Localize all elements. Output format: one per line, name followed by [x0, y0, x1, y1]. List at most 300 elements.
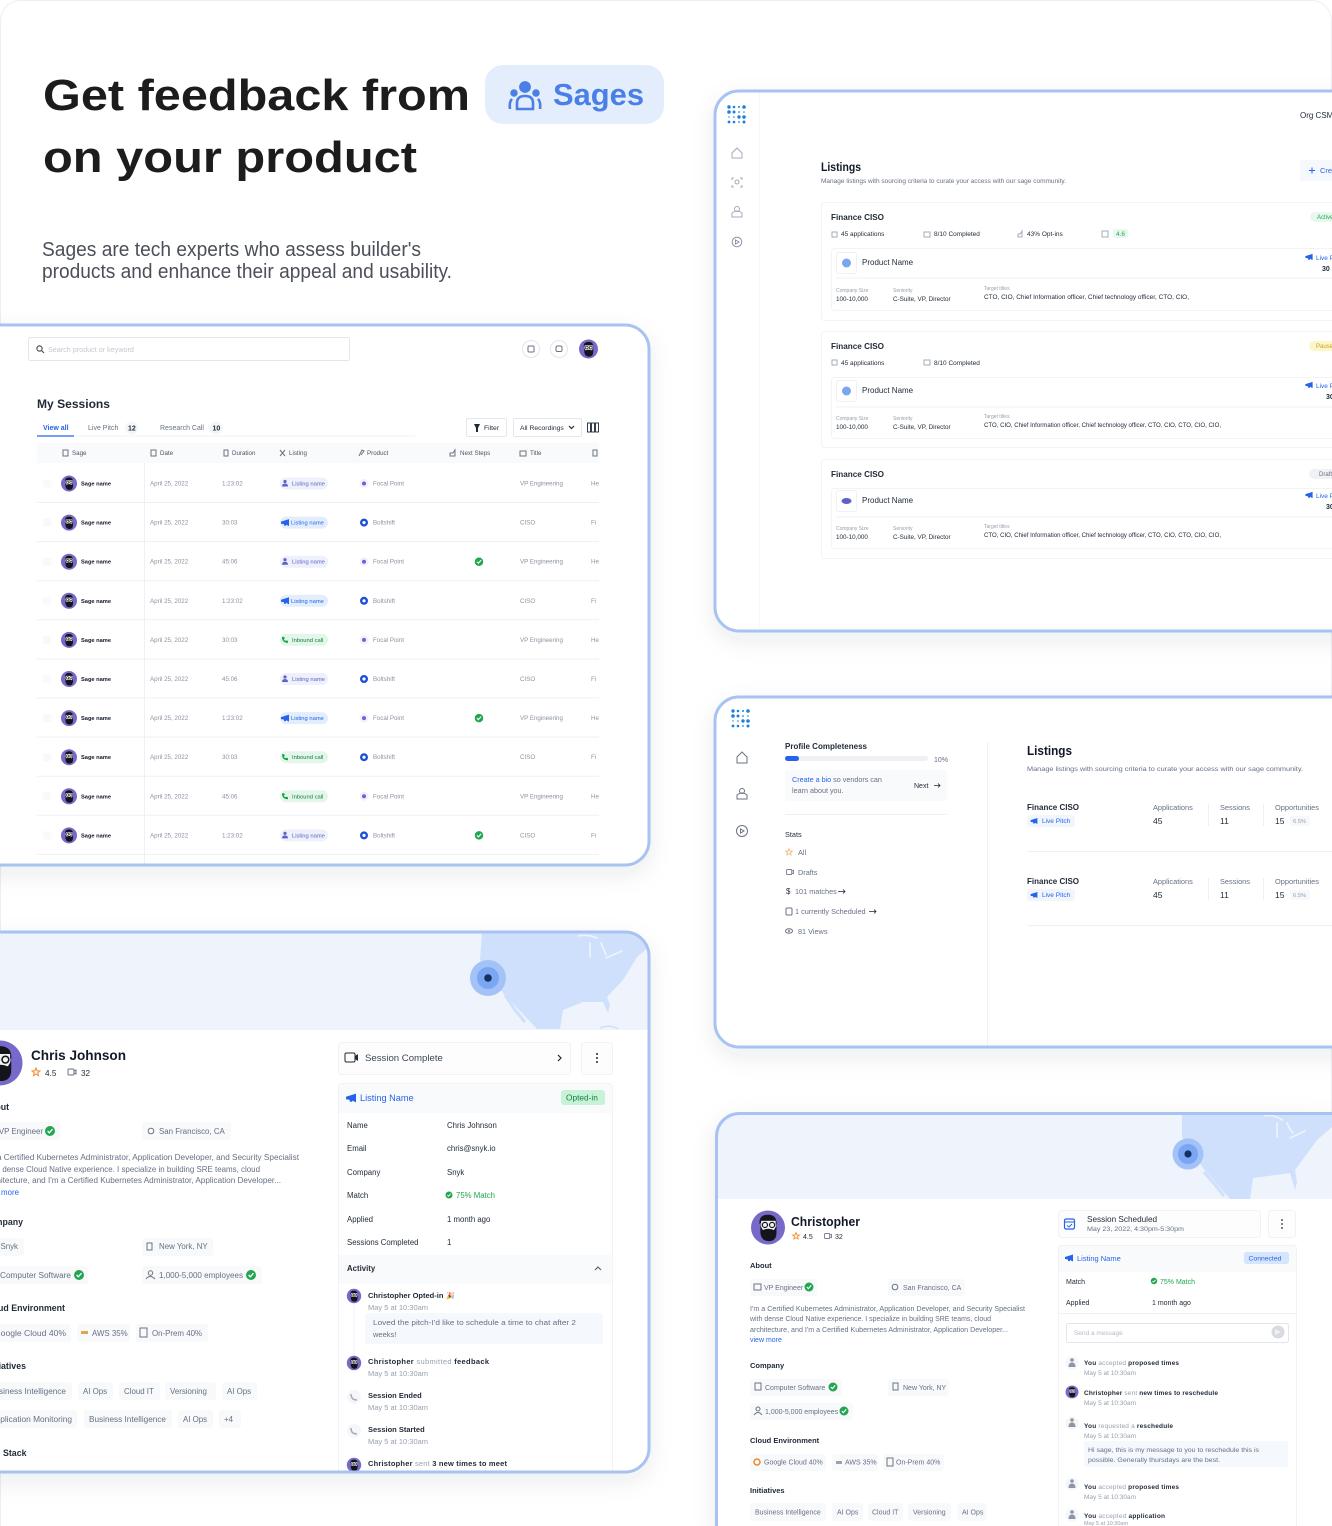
- listing header: Connected: [1248, 1256, 1282, 1262]
- section: about: view more: [750, 1337, 782, 1344]
- product block: CTO, CIO, Chief Information officer, Chief technology officer, CTO, CIO, CTO, CIO, CIO,: [984, 422, 1221, 429]
- listing header: Opted-in: [566, 1092, 598, 1102]
- avatar and name: 32: [835, 1234, 843, 1241]
- heading: [821, 162, 1066, 185]
- table header: [62, 448, 598, 456]
- product block: 100-10,000: [836, 534, 868, 541]
- table row 10: [37, 827, 599, 854]
- table row 10: Boltshift: [373, 832, 395, 839]
- listing details: Applied: [347, 1215, 373, 1224]
- listing card 1: 4.6: [1116, 231, 1125, 238]
- table row 9: He: [591, 793, 599, 800]
- section: cloud environment: AWS 35%: [92, 1329, 128, 1338]
- listing row 2: Opportunities: [1275, 877, 1319, 886]
- section: about: I'm a Certified Kubernetes Administrator, Application Developer, and Security Specialist: [750, 1306, 1025, 1313]
- section: initiatives: Cloud IT: [124, 1387, 154, 1396]
- table row 4: [37, 593, 599, 620]
- stats list: Stats: [785, 830, 802, 839]
- table row 3: [37, 554, 599, 581]
- panel: Christopher profile: [715, 1112, 1332, 1526]
- section: initiatives: AI Ops: [837, 1510, 859, 1516]
- product block: CTO, CIO, Chief Information officer, Chief technology officer, CTO, CIO, CTO, CIO, CIO,: [984, 532, 1221, 539]
- listing row 2: Live Pitch: [1042, 892, 1071, 899]
- table row 5: He: [591, 637, 599, 644]
- heading: Manage listings with sourcing criteria to curate your access with our sage community.: [1027, 766, 1303, 773]
- column divider: [144, 463, 145, 864]
- section: initiatives: AI Ops: [83, 1387, 107, 1396]
- filter controls: [466, 418, 598, 436]
- table row 2: Fi: [591, 520, 596, 527]
- table row 4: Sage name: [81, 599, 111, 605]
- section: company: New York, NY: [159, 1242, 208, 1251]
- table row 4: Fi: [591, 598, 596, 605]
- listing details: Sessions Completed: [347, 1238, 419, 1247]
- session scheduled card: May 23, 2022, 4:30pm-5:30pm: [1087, 1226, 1184, 1233]
- section: about: with dense Cloud Native experience. I specialize in building SRE teams, cloud: [749, 1316, 991, 1323]
- map header: [715, 1112, 1332, 1199]
- tabs: [37, 422, 415, 436]
- search bar: [28, 338, 350, 360]
- listing row 1: [1027, 802, 1332, 852]
- activity timeline: May 5 at 10:30am: [1084, 1494, 1136, 1501]
- table row 5: 30:03: [222, 637, 238, 644]
- listing card 1: 8/10 Completed: [934, 231, 980, 238]
- product block: C-Suite, VP, Director: [893, 424, 951, 431]
- session complete card: [338, 1042, 612, 1074]
- table row 6: Sage name: [81, 677, 111, 683]
- listing details: chris@snyk.io: [447, 1144, 496, 1153]
- product block: Company Size: [836, 288, 869, 294]
- listing details: Name: [347, 1121, 368, 1130]
- stats list: 101 matches: [795, 887, 837, 896]
- table row 6: [37, 671, 599, 698]
- column divider: [986, 742, 988, 1047]
- listing details: [347, 1121, 497, 1247]
- table row 8: Boltshift: [373, 754, 395, 761]
- listing details: Match: [1066, 1279, 1085, 1286]
- activity timeline: You accepted application: [1084, 1513, 1165, 1520]
- table header: Date: [160, 450, 174, 457]
- product block: Target titles: [984, 286, 1010, 292]
- listing row 2: Applications: [1153, 877, 1193, 886]
- table header: Listing: [289, 450, 307, 457]
- listing row 1: 11: [1220, 816, 1229, 826]
- listing card 1: [822, 202, 1332, 320]
- table row 8: CISO: [520, 754, 535, 761]
- table row 3: Sage name: [81, 560, 111, 566]
- section: company: New York, NY: [903, 1385, 947, 1392]
- section: initiatives: Business Intelligence: [89, 1415, 167, 1424]
- avatar and name: 4.5: [45, 1069, 57, 1078]
- activity timeline: May 5 at 10:30am: [368, 1369, 428, 1378]
- product block: Company Size: [836, 416, 869, 422]
- listing header: [1059, 1246, 1296, 1272]
- panel: Chris Johnson profile: [0, 932, 650, 1484]
- table row 1: VP Engineering: [520, 480, 563, 488]
- product block: [832, 488, 1332, 548]
- section: initiatives: [750, 1486, 987, 1521]
- listing row 2: Finance CISO: [1027, 876, 1079, 886]
- listing details: 75% Match: [456, 1191, 495, 1200]
- title: Get feedback from: [43, 71, 470, 120]
- filter controls: Filter: [484, 425, 500, 432]
- profile completeness: Create a bio so vendors can: [792, 775, 882, 784]
- activity timeline: Session Ended: [368, 1391, 422, 1400]
- activity timeline: May 5 at 10:30am: [1084, 1400, 1136, 1407]
- table row 7: Focal Point: [373, 715, 404, 722]
- heading: my sessions: My Sessions: [37, 397, 110, 411]
- table row 8: Sage name: [81, 755, 111, 761]
- avatar and name: Christopher: [791, 1215, 860, 1229]
- table row 1: Sage name: [81, 482, 111, 488]
- table row 1: April 25, 2022: [150, 480, 189, 488]
- sidebar icons: [731, 709, 750, 836]
- table row 7: 1:23:02: [222, 715, 243, 722]
- listing row 1: 6.5%: [1293, 819, 1306, 825]
- table header: Duration: [232, 450, 256, 457]
- profile completeness: Next: [914, 783, 928, 790]
- table row 5: [37, 632, 599, 659]
- section: cloud environment: Google Cloud 40%: [764, 1460, 823, 1466]
- listing details: 1 month ago: [1152, 1300, 1191, 1307]
- section: about: [749, 1261, 1025, 1344]
- stats list: 1 currently Scheduled: [795, 907, 866, 916]
- listing row 1: Finance CISO: [1027, 802, 1079, 812]
- activity header: Activity: [347, 1264, 376, 1273]
- stats list: Drafts: [798, 868, 818, 877]
- activity timeline: Session Started: [368, 1425, 425, 1434]
- avatar and name: 32: [81, 1069, 91, 1078]
- table row 2: Boltshift: [373, 520, 395, 527]
- listing details: Chris Johnson: [447, 1121, 497, 1130]
- table row 1: He: [591, 480, 599, 488]
- activity timeline: Christopher sent new times to reschedule: [1084, 1390, 1218, 1397]
- table row 8: Inbound call: [292, 755, 323, 761]
- product block: Product Name: [862, 258, 914, 267]
- table row 3: He: [591, 559, 599, 566]
- table row 1: Focal Point: [373, 480, 404, 488]
- section: company: [0, 1220, 256, 1280]
- table row 2: CISO: [520, 520, 535, 527]
- table row 9: 45:06: [222, 793, 238, 800]
- listing details: [1059, 1278, 1296, 1314]
- table row 9: VP Engineering: [520, 793, 563, 800]
- listing row 1: 15: [1275, 816, 1285, 826]
- activity timeline: 🎉: [446, 1291, 455, 1300]
- badge: Sages: [485, 65, 664, 124]
- activity timeline: You requested a reschedule: [1084, 1423, 1173, 1430]
- table row 1: 1:23:02: [222, 480, 243, 488]
- section: initiatives: AI Ops: [183, 1415, 207, 1424]
- table row 6: CISO: [520, 676, 535, 683]
- table row 10: Fi: [591, 832, 596, 839]
- profile completeness: 10%: [934, 757, 948, 764]
- listing details: Applied: [1066, 1300, 1089, 1307]
- badge: Sages: Sages: [553, 77, 644, 112]
- product block: [832, 248, 1332, 310]
- activity timeline: Christopher submitted feedback: [368, 1357, 490, 1366]
- listing details: 75% Match: [1160, 1279, 1195, 1286]
- heading: [1027, 743, 1303, 773]
- table row 7: April 25, 2022: [150, 715, 189, 722]
- table row 3: Focal Point: [373, 559, 404, 566]
- avatar and name: [751, 1210, 860, 1244]
- profile completeness: Profile Completeness: [785, 742, 868, 751]
- listing card: [1058, 1246, 1296, 1526]
- listing row 2: 15: [1275, 890, 1285, 900]
- table row 2: Sage name: [81, 521, 111, 527]
- search bar: Search product or keyword: [48, 345, 134, 354]
- icon: people group: [510, 82, 540, 109]
- table row 6: Boltshift: [373, 676, 395, 683]
- message input: Send a message: [1074, 1330, 1123, 1337]
- table row 8: Fi: [591, 754, 596, 761]
- section: cloud environment: On-Prem 40%: [152, 1329, 202, 1338]
- listing row 1: Applications: [1153, 803, 1193, 812]
- activity timeline: May 5 at 10:30am: [368, 1403, 428, 1412]
- section: company: 1,000-5,000 employees: [159, 1271, 243, 1280]
- section: initiatives: Stack: [3, 1448, 27, 1458]
- listing details: Email: [347, 1144, 367, 1153]
- tabs: View all: [43, 425, 69, 432]
- session scheduled card: Session Scheduled: [1087, 1215, 1158, 1224]
- listing row 2: 45: [1153, 890, 1163, 900]
- table row 9: April 25, 2022: [150, 793, 189, 800]
- activity timeline: Christopher sent 3 new times to meet: [368, 1459, 508, 1468]
- listing row 2: Sessions: [1220, 877, 1250, 886]
- stats list: [785, 830, 876, 936]
- table row 1: [37, 476, 599, 502]
- table row 2: April 25, 2022: [150, 520, 189, 527]
- listing card 1: Finance CISO: [831, 212, 884, 222]
- tabs: Live Pitch: [88, 425, 118, 432]
- stats list: 81 Views: [798, 927, 828, 936]
- activity timeline: [347, 1289, 603, 1472]
- listing card: [338, 1084, 612, 1484]
- table row 4: CISO: [520, 598, 535, 605]
- session complete card: Session Complete: [365, 1053, 443, 1064]
- listing card 2: 45 applications: [841, 360, 885, 367]
- table row 6: Listing name: [292, 677, 325, 683]
- listing header: [339, 1084, 612, 1105]
- section: cloud environment: AWS 35%: [845, 1460, 877, 1466]
- table header: Sage: [72, 450, 87, 457]
- product block: 30: [1322, 266, 1330, 273]
- table row 7: VP Engineering: [520, 715, 563, 722]
- sidebar: [727, 91, 760, 631]
- product block: Target titles: [984, 414, 1010, 420]
- product block: 100-10,000: [836, 424, 868, 431]
- table row 2: 30:03: [222, 520, 238, 527]
- product block: C-Suite, VP, Director: [893, 296, 951, 303]
- activity timeline: May 5 at 10:30am: [368, 1303, 428, 1312]
- listing row 2: 11: [1220, 890, 1229, 900]
- section: initiatives: AI Ops: [227, 1387, 251, 1396]
- section: company: Company: [750, 1361, 785, 1370]
- section: initiatives: AI Ops: [962, 1510, 984, 1516]
- table header: Title: [530, 450, 542, 457]
- section: about: VP Engineer: [764, 1285, 804, 1292]
- table row 10: CISO: [520, 832, 535, 839]
- activity timeline: [1066, 1356, 1288, 1526]
- product block: Product Name: [862, 386, 914, 395]
- activity timeline: May 5 at 10:30am: [1084, 1370, 1136, 1377]
- table row 9: Sage name: [81, 794, 111, 800]
- listing details: 1: [447, 1238, 451, 1247]
- section: initiatives: [0, 1361, 257, 1458]
- table row 4: 1:23:02: [222, 598, 243, 605]
- activity timeline: May 5 at 10:30am: [368, 1437, 428, 1446]
- table row 10: Sage name: [81, 833, 111, 839]
- product block: Company Size: [836, 526, 869, 532]
- activity timeline: possible. Generally thursdays are the best.: [1088, 1457, 1220, 1464]
- table row 7: Sage name: [81, 716, 111, 722]
- heading: Listings: [1027, 743, 1072, 758]
- table row 9: Focal Point: [373, 793, 404, 800]
- table row 7: He: [591, 715, 599, 722]
- section: about: VP Engineer: [0, 1127, 43, 1136]
- table row 8: [37, 749, 599, 776]
- create button: [1300, 160, 1332, 181]
- listing row 1: Opportunities: [1275, 803, 1319, 812]
- table row 5: Inbound call: [292, 638, 323, 644]
- product block: Seniority: [893, 416, 913, 422]
- section: initiatives: Versioning: [913, 1510, 946, 1516]
- table row 6: April 25, 2022: [150, 676, 189, 683]
- session scheduled card: [1058, 1210, 1296, 1238]
- profile completeness: [785, 742, 948, 814]
- table header: Product: [367, 450, 389, 457]
- heading: Listings: [821, 162, 861, 174]
- table row 2: [37, 515, 599, 542]
- header icons and avatar: [522, 340, 598, 358]
- table row 4: April 25, 2022: [150, 598, 189, 605]
- table row 4: Boltshift: [373, 598, 395, 605]
- avatar and name: Chris Johnson: [31, 1048, 126, 1063]
- table row 1: Listing name: [292, 482, 325, 488]
- panel: listings with cards: [715, 91, 1332, 631]
- message input: [1066, 1324, 1288, 1342]
- table row 5: VP Engineering: [520, 637, 563, 644]
- section: initiatives: Versioning: [170, 1387, 207, 1396]
- listing row 1: Sessions: [1220, 803, 1250, 812]
- stats list: All: [798, 848, 806, 857]
- product block: C-Suite, VP, Director: [893, 534, 951, 541]
- listing card 2: Finance CISO: [831, 341, 884, 351]
- product block: CTO, CIO, Chief Information officer, Chief technology officer, CTO, CIO,: [984, 294, 1189, 301]
- section: cloud environment: Cloud Environment: [750, 1436, 820, 1445]
- listing header: Listing Name: [360, 1093, 414, 1103]
- title: [43, 71, 470, 182]
- listing details: Company: [347, 1168, 380, 1177]
- section: cloud environment: On-Prem 40%: [896, 1460, 940, 1466]
- activity timeline: Christopher Opted-in: [368, 1291, 444, 1300]
- table row 9: [37, 788, 599, 815]
- table row 8: April 25, 2022: [150, 754, 189, 761]
- table row 9: Inbound call: [292, 794, 323, 800]
- profile completeness: learn about you.: [792, 786, 844, 795]
- activity timeline: You accepted proposed times: [1084, 1360, 1179, 1367]
- tabs: Research Call: [160, 425, 204, 432]
- listing card 2: 8/10 Completed: [934, 360, 980, 367]
- activity header: [347, 1265, 602, 1272]
- listing details: 1 month ago: [447, 1215, 491, 1224]
- table row 5: Sage name: [81, 638, 111, 644]
- section: initiatives: +4: [224, 1415, 234, 1424]
- listing header: Listing Name: [1077, 1254, 1121, 1263]
- section: company: Computer Software: [0, 1271, 72, 1280]
- section: initiatives: Business Intelligence: [755, 1510, 821, 1516]
- avatar and name: 4.5: [803, 1234, 813, 1241]
- avatar and name: [0, 1040, 126, 1086]
- activity timeline: weeks!: [372, 1330, 396, 1339]
- product block: Seniority: [893, 288, 913, 294]
- section: about: About: [750, 1261, 772, 1270]
- product block: Target titles: [984, 524, 1010, 530]
- listing card 1: 43% Opt-ins: [1027, 231, 1064, 238]
- listing card 3: Draft: [1319, 472, 1332, 478]
- stats list: $: [786, 887, 791, 896]
- table row 3: VP Engineering: [520, 559, 563, 566]
- table row 6: Fi: [591, 676, 596, 683]
- table row 3: Listing name: [292, 560, 325, 566]
- section: about: San Francisco, CA: [903, 1285, 962, 1292]
- section: about: architecture, and I'm a Certified Kubernetes Administrator, Application Developer...: [750, 1327, 1008, 1334]
- section: about: San Francisco, CA: [159, 1127, 226, 1136]
- table header: Next Steps: [460, 450, 490, 457]
- section: company: Snyk: [0, 1242, 18, 1251]
- listing details: Snyk: [447, 1168, 464, 1177]
- table row 5: April 25, 2022: [150, 637, 189, 644]
- table row 10: Listing name: [292, 833, 325, 839]
- subtitle: [42, 239, 452, 283]
- table row 7: Listing name: [291, 716, 324, 722]
- section: company: 1,000-5,000 employees: [765, 1409, 839, 1416]
- table row 7: [37, 710, 599, 737]
- tabs: 12: [128, 426, 136, 432]
- tabs: 10: [212, 426, 220, 432]
- listing row 2: [1027, 876, 1332, 926]
- activity timeline: May 5 at 10:30am: [1084, 1433, 1136, 1440]
- listing card 2: [822, 332, 1332, 448]
- table row 6: 45:06: [222, 676, 238, 683]
- listing card 3: Finance CISO: [831, 469, 884, 479]
- section: initiatives: Initiatives: [750, 1486, 785, 1495]
- subtitle: products and enhance their appeal and usability.: [42, 261, 452, 283]
- section: cloud environment: [750, 1436, 944, 1471]
- panel: my sessions table: [0, 325, 649, 865]
- listing row 2: 6.5%: [1293, 893, 1306, 899]
- product block: Seniority: [893, 526, 913, 532]
- panel: profile completeness and listings: [715, 697, 1332, 1047]
- table row 3: 45:06: [222, 559, 238, 566]
- table row 10: 1:23:02: [222, 832, 243, 839]
- product block: 100-10,000: [836, 296, 868, 303]
- listing card 3: [822, 460, 1332, 558]
- product block: Product Name: [862, 496, 914, 505]
- section: company: Computer Software: [765, 1385, 825, 1392]
- listing row 1: 45: [1153, 816, 1163, 826]
- table row 8: 30:03: [222, 754, 238, 761]
- listing row 1: Live Pitch: [1042, 818, 1071, 825]
- section: company: [750, 1361, 949, 1420]
- subtitle: Sages are tech experts who assess builder's: [42, 239, 421, 261]
- listing card 1: 45 applications: [841, 231, 885, 238]
- activity timeline: You accepted proposed times: [1084, 1484, 1179, 1491]
- activity timeline: Loved the pitch-I'd like to schedule a time to chat after 2: [373, 1318, 576, 1327]
- section: cloud environment: [0, 1304, 202, 1338]
- table row 10: April 25, 2022: [150, 832, 189, 839]
